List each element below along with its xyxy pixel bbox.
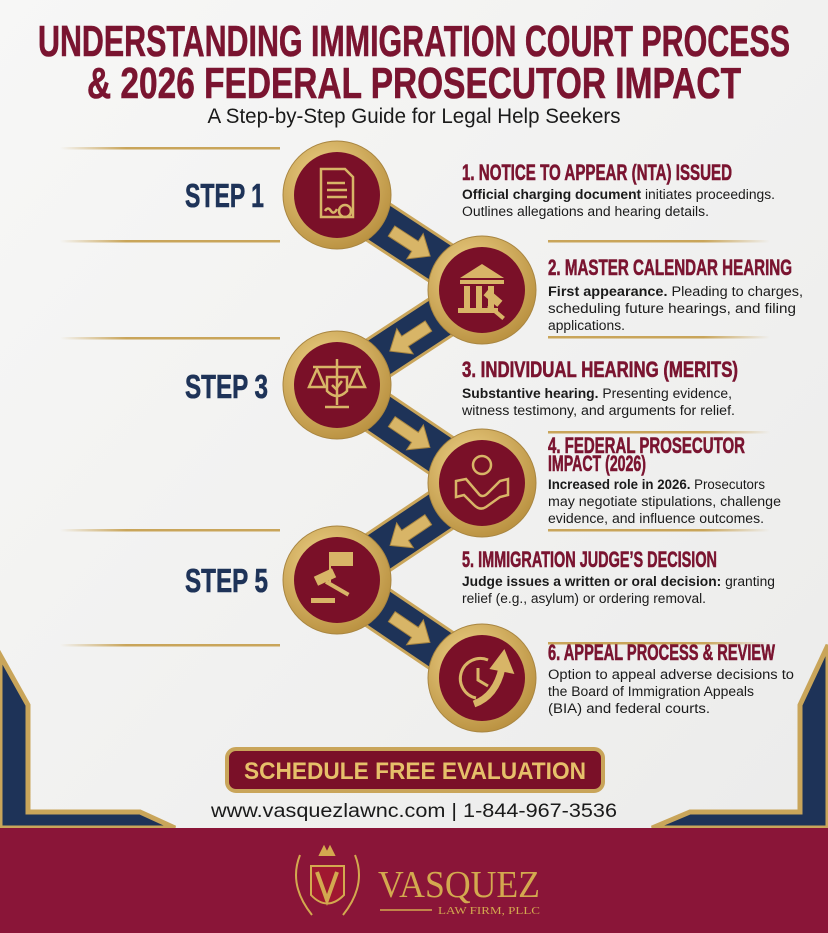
logo wordmark: VASQUEZ [378, 864, 540, 906]
step 3 text: witness testimony, and arguments for relief. [461, 403, 735, 418]
circle 3 [283, 331, 391, 439]
footer band [0, 828, 828, 933]
step 3 text: 3. INDIVIDUAL HEARING (MERITS) [462, 357, 738, 382]
icon: document [321, 169, 353, 217]
circle 1 [283, 141, 391, 249]
step 5 text: relief (e.g., asylum) or ordering removal. [462, 591, 706, 606]
bottom frame right [652, 645, 828, 828]
step 5 text: Judge issues a written or oral decision: granting [462, 574, 775, 589]
step 3 text: Substantive hearing. Presenting evidence, [462, 386, 732, 401]
step 6 text: (BIA) and federal courts. [548, 701, 710, 716]
step 2 text: scheduling future hearings, and filing [548, 301, 796, 316]
icon: courthouse gavel [458, 264, 505, 320]
zigzag connector path [337, 195, 482, 678]
icon: gavel flag [311, 552, 353, 603]
circle 5 [283, 526, 391, 634]
circle 2 [428, 236, 536, 344]
step 5 text [462, 547, 775, 606]
step 4 text: evidence, and influence outcomes. [548, 511, 764, 526]
step labels: STEP 1 [185, 177, 264, 214]
gold divider lines [60, 147, 770, 646]
step 1 text [462, 160, 775, 219]
circle 6 [428, 624, 536, 732]
step 1 text: Official charging document initiates proceedings. [462, 187, 775, 202]
step 1 text: Outlines allegations and hearing details. [462, 204, 709, 219]
icon: clock arrow [460, 652, 512, 704]
step 2 text: First appearance. Pleading to charges, [548, 284, 803, 299]
contact line: www.vasquezlawnc.com | 1-844-967-3536 [210, 801, 617, 822]
step 6 text: Option to appeal adverse decisions to [548, 667, 794, 682]
logo emblem [296, 847, 359, 915]
logo: LAW FIRM, PLLC [438, 905, 540, 917]
icon: handshake seal [456, 456, 508, 509]
arrow 3-4 [383, 409, 438, 460]
title [38, 17, 790, 108]
arrow 4-5 [382, 507, 437, 558]
subtitle: A Step-by-Step Guide for Legal Help Seekers [208, 105, 620, 128]
bottom frame left [0, 655, 175, 828]
icon: scales [309, 359, 365, 407]
step 4 text: Increased role in 2026. Prosecutors [548, 477, 765, 492]
arrow 1-2 [383, 218, 438, 269]
step labels: STEP 3 [185, 368, 268, 405]
step 4 text [548, 433, 781, 526]
arrows [382, 218, 438, 655]
step 3 text [461, 357, 738, 418]
step labels [185, 177, 268, 599]
step 6 text: the Board of Immigration Appeals [548, 684, 754, 699]
step 4 text: IMPACT (2026) [548, 451, 646, 476]
logo [296, 847, 540, 917]
circle 4 [428, 429, 536, 537]
CTA button [227, 749, 603, 791]
CTA button: SCHEDULE FREE EVALUATION [244, 758, 586, 785]
step labels: STEP 5 [185, 562, 268, 599]
arrow 5-6 [383, 604, 438, 655]
step 2 text: applications. [548, 318, 625, 333]
step 2 text [548, 255, 803, 333]
step 6 text [548, 640, 794, 716]
arrow 2-3 [382, 313, 437, 364]
step 4 text: may negotiate stipulations, challenge [548, 494, 781, 509]
